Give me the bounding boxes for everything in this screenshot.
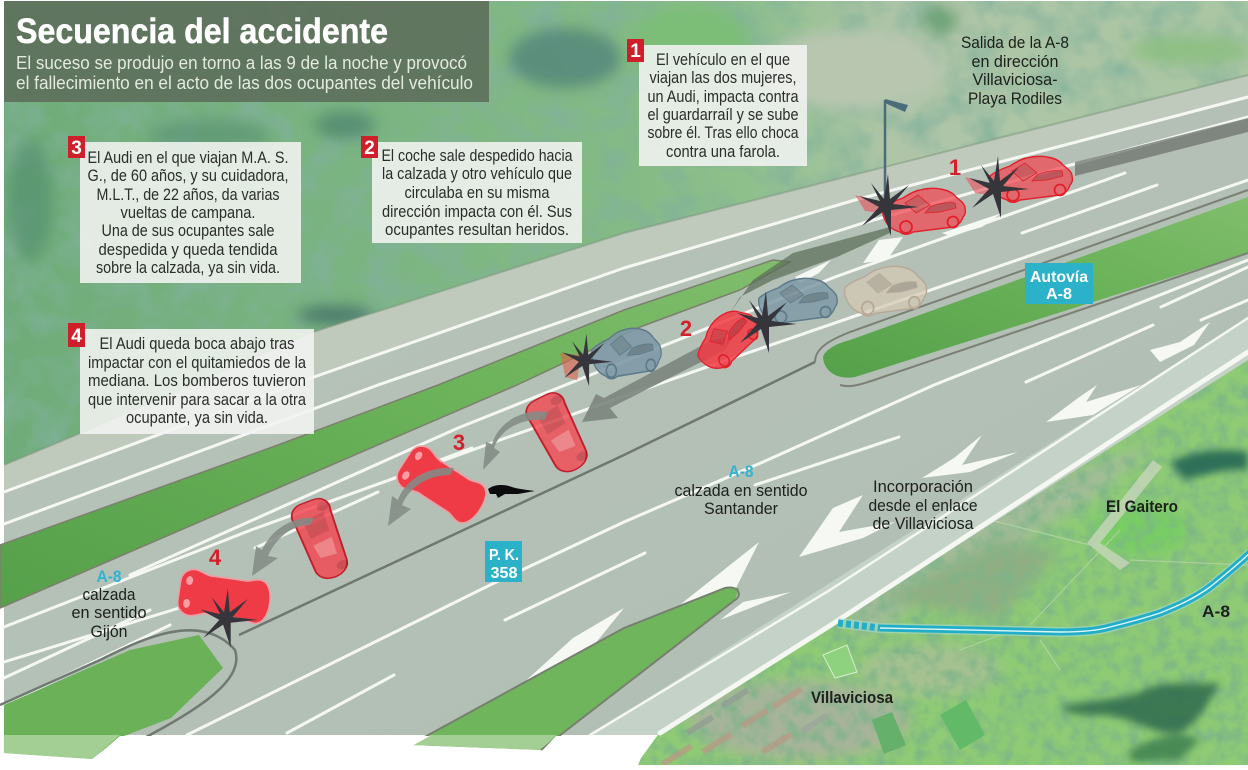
- text block 3: despedida y queda tendida: [98, 240, 278, 259]
- sequence numbers: 1: [949, 155, 961, 180]
- star: collision: [737, 291, 797, 353]
- label: salida A-8: en dirección: [972, 52, 1058, 71]
- subtitle: El suceso se produjo en torno a las 9 de la noche y provocó: [16, 53, 467, 73]
- star: median barrier: [200, 589, 257, 647]
- place labels: [811, 497, 1230, 707]
- label: A-8 sentido Gijón: en sentido: [72, 603, 146, 622]
- label: incorporación: Incorporación: [873, 477, 973, 496]
- hillside aerial background: [4, 1, 1248, 481]
- text block 4: ocupante, ya sin vida.: [126, 408, 268, 427]
- badge 3: [68, 136, 85, 159]
- label: A-8 sentido Gijón: Gijón: [90, 622, 128, 641]
- callout 3: [68, 136, 301, 283]
- cars: [176, 156, 1072, 626]
- sequence numbers: [209, 155, 961, 570]
- tag: P.K. 358: P. K.: [489, 547, 519, 564]
- tag: P.K. 358: [485, 541, 522, 582]
- badge 1: 1: [630, 41, 641, 62]
- satellite view of Villaviciosa area: [630, 350, 1248, 770]
- text block 1: viajan las dos mujeres,: [650, 68, 796, 87]
- text block 3: Una de sus ocupantes sale: [102, 221, 274, 240]
- sequence numbers: 2: [680, 316, 692, 341]
- rural tracks: [960, 520, 1248, 670]
- tag: Autovía A-8: [1025, 263, 1093, 304]
- car: red, hits lamp post: [883, 188, 965, 234]
- callout 1: [627, 39, 807, 166]
- impact stars: [200, 156, 1029, 647]
- label: salida A-8: Salida de la A-8: [961, 33, 1069, 52]
- text block 2: El coche sale despedido hacia: [382, 146, 573, 165]
- tag: P.K. 358: 358: [490, 565, 518, 582]
- A-8 route line on map: [838, 553, 1248, 632]
- star: blue vehicle: [560, 334, 613, 386]
- sequence numbers: 4: [209, 545, 222, 570]
- label: A-8 sentido Santander: Santander: [704, 499, 778, 518]
- tag: Autovía A-8: Autovía: [1030, 269, 1088, 286]
- curved roll arrows: [252, 411, 548, 576]
- badge 2: 2: [364, 138, 375, 159]
- car: red, rolling 2: [392, 441, 493, 529]
- callout 2: [361, 136, 582, 243]
- label: salida A-8: Villaviciosa-: [972, 70, 1058, 89]
- car: blue vehicle, lane: [759, 278, 837, 324]
- road chevrons: [521, 213, 1210, 685]
- text block 2: circulaba en su misma: [404, 183, 550, 202]
- label: A-8 sentido Santander: calzada en sentido: [674, 481, 808, 500]
- green median, right: [823, 197, 1248, 378]
- car: red, rolling 3: [288, 495, 354, 584]
- lamp post: [885, 99, 908, 205]
- title: Secuencia del accidente: [16, 12, 388, 51]
- text block 2: ocupantes resultan heridos.: [385, 220, 569, 239]
- car: red, rolling 1: [522, 389, 594, 478]
- text block 1: un Audi, impacta contra: [648, 87, 799, 106]
- label: incorporación: de Villaviciosa: [872, 514, 974, 533]
- crash tracks: [730, 118, 1248, 313]
- label: salida A-8: Playa Rodiles: [968, 89, 1062, 108]
- text block 2: dirección impacta con él. Sus: [382, 202, 572, 221]
- text block 4: impactar con el quitamiedos de la: [88, 353, 306, 372]
- text block 1: contra una farola.: [666, 142, 780, 161]
- subtitle: el fallecimiento en el acto de las dos ocupantes del vehículo: [16, 73, 473, 93]
- callout 4: [68, 323, 314, 434]
- arrow: car thrown onto road: [582, 337, 733, 422]
- car: beige vehicle: [845, 266, 927, 316]
- star: lamp post: [855, 174, 919, 236]
- label: A-8 sentido Gijón: calzada: [82, 585, 136, 604]
- label: A-8 sentido Gijón: A-8: [96, 567, 122, 586]
- fallen victim silhouette: [488, 485, 535, 498]
- label: A-8 sentido Santander: A-8: [728, 462, 754, 481]
- sequence numbers: 3: [453, 430, 465, 455]
- car: red, final position upside down: [176, 568, 273, 626]
- text block 4: El Audi queda boca abajo tras: [100, 334, 294, 353]
- badge 4: 4: [71, 326, 82, 347]
- car: red, collision on road: [686, 301, 768, 378]
- car: red, hits guardrail: [990, 156, 1072, 202]
- text block 4: mediana. Los bomberos tuvieron: [88, 371, 306, 390]
- green gore, bottom left: [0, 630, 236, 759]
- label: incorporación: desde el enlace: [868, 496, 978, 515]
- place labels: El Gaitero: [1106, 497, 1178, 516]
- text block 4: que intervenir para sacar a la otra: [88, 390, 306, 409]
- text block 2: la calzada y otro vehículo que: [382, 164, 572, 183]
- place labels: Villaviciosa: [811, 688, 893, 707]
- green gore, bottom centre: [410, 587, 739, 750]
- label: A-8 sentido Santander: [674, 462, 808, 518]
- green median, upper: [0, 260, 790, 608]
- car: blue vehicle, impact: [592, 328, 661, 379]
- tag: Autovía A-8: A-8: [1046, 286, 1072, 303]
- text block 1: El vehículo en el que: [656, 50, 790, 69]
- text block 1: el guardarraíl y se sube: [648, 105, 798, 124]
- header panel: [4, 1, 489, 102]
- text block 3: M.L.T., de 22 años, da varias: [96, 185, 280, 204]
- text block 3: vueltas de campana.: [120, 203, 256, 222]
- badge 2: [361, 136, 378, 159]
- text block 3: El Audi en el que viajan M.A. S.: [88, 148, 288, 167]
- text block 3: sobre la calzada, ya sin vida.: [96, 258, 280, 277]
- star: guardrail: [965, 156, 1029, 218]
- town blocks: [661, 686, 829, 767]
- badge 3: 3: [71, 138, 82, 159]
- guardrail line between carriageways: [239, 362, 815, 635]
- El Gaitero strip: [1087, 460, 1162, 570]
- badge 1: [627, 39, 644, 62]
- label: A-8 sentido Gijón: [72, 567, 146, 641]
- text block 1: sobre él. Tras ello choca: [648, 123, 799, 142]
- text block 3: G., de 60 años, y su cuidadora,: [88, 166, 288, 185]
- badge 4: [68, 323, 85, 347]
- place labels: A-8: [1202, 602, 1230, 621]
